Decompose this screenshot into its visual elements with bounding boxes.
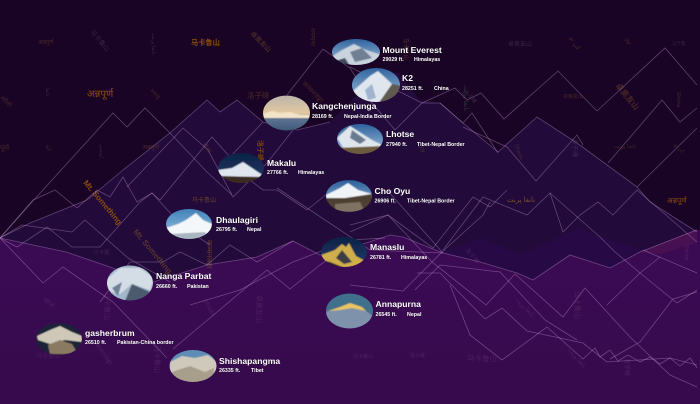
photo: K2 [352,68,400,102]
multilingual labels: dim group: पूर्ण [418,145,425,153]
name: Mount Everest [382,45,442,55]
multilingual labels: dim group: मकालु [149,88,162,101]
details: 26781 ft. [370,255,392,261]
details: 26545 ft. [376,312,397,318]
photo: Nanga Parbat [106,264,154,301]
multilingual labels: dim group: अन्नपूर्ण [38,38,55,46]
multilingual labels: faint lower group: 马卡鲁山 [467,353,497,363]
photo: Dhaulagiri [166,209,212,239]
multilingual labels: faint lower group: Shisha [683,245,689,261]
photo: Shishapangma [169,349,218,383]
details: 28251 ft. [402,86,424,92]
multilingual labels: faint lower group: कञ्चनजङ्घा [93,343,113,367]
multilingual labels: dim group: نانغا پربت [150,33,156,56]
name: Dhaulagiri [216,215,258,225]
photo: Mount Everest [332,39,380,65]
details: 26660 ft. [156,284,178,290]
peak: Mount Everest: Himalayas [414,57,440,63]
peak: Manaslu: Himalayas [401,255,427,261]
multilingual labels: dim group [0,28,686,161]
multilingual labels: dim group: نانغا [44,88,50,96]
multilingual labels: dim group: كي تو [672,141,686,155]
details: 28169 ft. [312,114,334,120]
multilingual labels: faint lower group: 马卡 [412,301,422,308]
name: Shishapangma [219,356,280,366]
photo: gasherbrum [35,322,83,356]
peak: Shishapangma [169,349,280,383]
photo: Makalu [218,153,264,183]
peak: Cho Oyu: Tibet-Nepal Border [407,198,455,204]
middle mountain silhouette [393,228,700,404]
multilingual labels: dim group: शगमाथा [309,28,315,46]
multilingual labels: faint lower group: نانغا پربت [566,347,588,370]
front mountain silhouette [0,230,700,404]
peak: Kangchenjunga [262,95,391,132]
details: 26906 ft. [374,198,396,204]
multilingual labels: dim group: 马卡鲁山 [402,38,410,60]
multilingual labels: faint lower group: 洛子峰 [623,358,631,376]
peak: Shishapangma: Tibet [251,368,264,374]
details: 27940 ft. [386,142,408,148]
photo: Manaslu [321,237,367,267]
details: 29029 ft. [382,57,404,63]
multilingual labels: dim group: نانغا پربت [462,85,469,111]
far right lighter band [640,229,697,254]
peak: Dhaulagiri [165,208,262,240]
multilingual labels: dim group: 卓奥友山 [613,81,642,112]
multilingual labels: faint lower group: 洛子峰 [410,352,425,359]
multilingual labels: faint lower group: 卓奥友山 [255,295,264,323]
multilingual label: Annapurna large: अन्नपूर्ण [87,88,114,100]
peak: Annapurna [325,293,422,330]
photo: Cho Oyu [325,180,373,213]
details: 26795 ft. [216,227,238,233]
multilingual labels: faint lower group: 马卡鲁 [93,248,110,256]
peak: Kangchenjunga: Nepal-India Border [344,114,391,120]
multilingual labels: faint lower group [36,245,689,376]
multilingual labels: dim group: पूर्ण [624,38,631,45]
name: Makalu [267,158,296,168]
multilingual labels: faint lower group: نانغا پربت [514,296,536,319]
name: gasherbrum [85,328,135,338]
name: Manaslu [370,242,404,252]
multilingual labels: dim group: 马卡鲁山 [88,28,112,53]
multilingual labels: dim group: पूर्ण [0,143,10,152]
peak: Nanga Parbat: Pakistan [187,284,209,290]
multilingual label: Devanagari vertical: कञ्चनजङ्घा [205,240,212,269]
multilingual labels: dim group: अन्नपूर्ण [142,143,160,151]
peak: Lhotse: Tibet-Nepal Border [417,142,465,148]
peak: Makalu [217,152,324,184]
multilingual labels: dim group: 洛子峰 [247,90,270,100]
multilingual labels: faint lower group: ल्होत्से [42,296,56,309]
peak: gasherbrum: Pakistan-China border [117,340,174,346]
peak: gasherbrum [35,322,174,356]
multilingual label: Annapurna right: अन्नपूर्ण [667,196,688,206]
peak: Nanga Parbat [106,264,212,301]
multilingual labels: dim group: 卓奥友山 [249,29,273,54]
name: Annapurna [376,299,421,309]
photo: Annapurna [325,293,374,330]
multilingual labels: faint lower group: 马卡鲁山 [103,292,112,320]
multilingual label: Mt. Something lower: Mt. Something [131,228,174,276]
peak: K2 [352,68,449,102]
multilingual labels: dim group: 洛子峰 [571,138,580,158]
peak: Dhaulagiri: Nepal [247,227,262,233]
multilingual label: Lhotse: 洛子峰 [256,140,265,161]
multilingual labels: faint lower group: 马卡鲁山 [573,291,582,319]
details: 27766 ft. [267,170,289,176]
name: Cho Oyu [374,186,410,196]
peak: Makalu: Himalayas [298,170,324,176]
peak: Mount Everest [330,38,442,66]
photo: Kangchenjunga [263,96,310,130]
multilingual labels: dim group: 卓奥友山 [563,93,583,100]
peak: Lhotse [336,123,465,155]
photo: Lhotse [337,124,383,154]
multilingual labels: faint lower group: 马卡鲁山 [36,352,60,360]
multilingual labels: dim group: धौला [200,141,214,155]
multilingual labels: faint lower group: 马卡鲁山 [153,345,162,373]
multilingual labels: faint lower group: 马卡鲁山 [353,353,373,360]
peak: Annapurna: Nepal [407,312,422,318]
multilingual label: Mt. Something: Mt. Something [81,179,124,227]
multilingual labels: dim group: 马卡鲁 [672,40,686,47]
multilingual labels: dim group: कञ्चनजङ्घा [301,80,325,104]
peak: K2: China [434,86,449,92]
peak: Cho Oyu [325,180,455,213]
multilingual labels: dim group: 卓奥友山 [508,40,532,48]
multilingual labels: dim group: Dhaula [513,144,524,161]
multilingual labels: dim group: كي تو [568,35,582,52]
multilingual label: Makalu chinese: 马卡鲁山 [191,38,220,47]
name: K2 [402,73,413,83]
multilingual label: Makalu lower: 马卡鲁山 [192,196,216,204]
multilingual labels: dim group: نانغا پربت [614,144,637,150]
multilingual labels: faint lower group: 洛子峰 [463,246,481,265]
name: Nanga Parbat [156,271,212,281]
details: 26335 ft. [219,368,241,374]
peak: Manaslu [320,236,427,268]
multilingual labels: dim group: K2 [44,144,52,153]
multilingual labels: dim group: لوتسي [98,144,104,159]
multilingual labels: dim group: 洛子峰 [462,88,479,105]
name: Kangchenjunga [312,101,377,111]
details: 26510 ft. [85,340,107,346]
multilingual label: Arabic: نانغا پربت [507,197,535,204]
name: Lhotse [386,129,414,139]
multilingual labels: faint lower group: Dhaula [201,298,216,318]
multilingual labels: dim group: Shisha [675,92,681,108]
